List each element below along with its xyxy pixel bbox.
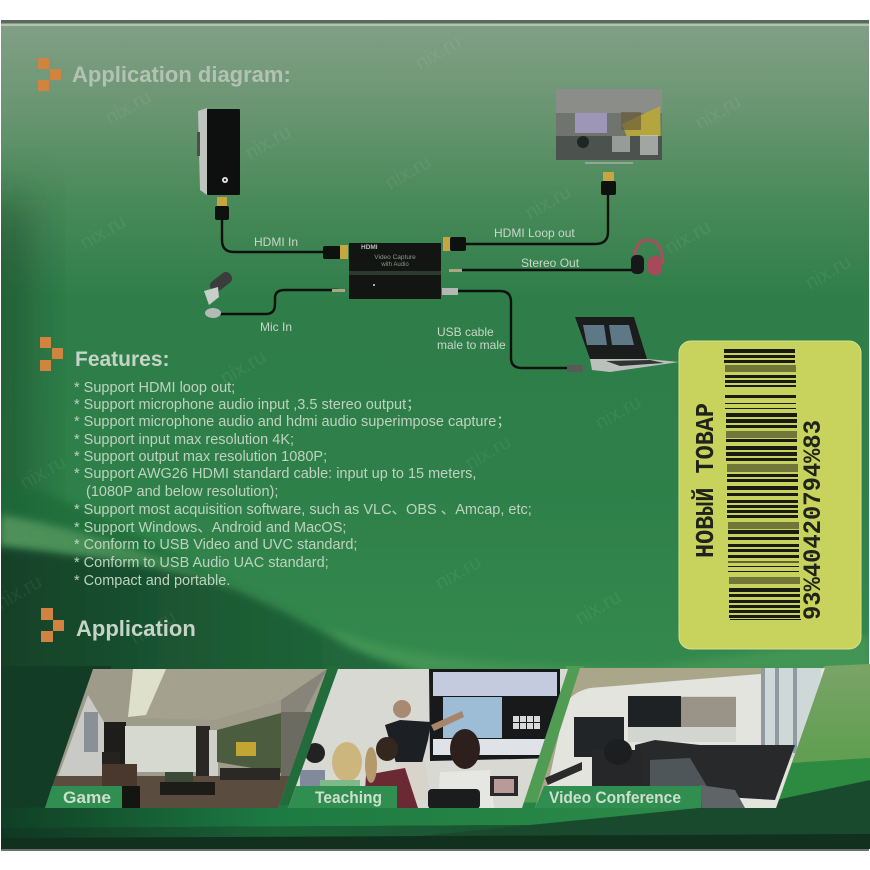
watermarks: nix.ru: nix.ru	[16, 451, 70, 494]
text block: feature list: (1080P and below resolution);	[86, 484, 278, 500]
sticker: barcode label	[679, 341, 861, 649]
heading: features: Features:	[75, 348, 170, 371]
labels: connection names: Stereo Out	[521, 256, 580, 270]
icon: microphone	[204, 270, 234, 318]
labels: connection names: HDMI Loop out	[494, 226, 575, 240]
text: new product: НОВЫЙ ТОВАР	[691, 403, 721, 558]
text block: feature list: * Conform to USB Audio UAC standard;	[74, 555, 329, 571]
text block: feature list: * Conform to USB Video and UVC standard;	[74, 537, 357, 553]
label: game: Game	[63, 788, 111, 807]
text block: feature list: * Compact and portable.	[74, 573, 230, 589]
icon: USB plug at laptop	[567, 365, 583, 372]
labels: connection names: Mic In	[260, 320, 292, 334]
labels: connection names: male to male	[437, 338, 506, 352]
watermarks: nix.ru: nix.ru	[592, 391, 645, 434]
barcode	[724, 349, 801, 620]
icon: capture device: with Audio	[380, 262, 409, 268]
watermarks: nix.ru: nix.ru	[662, 216, 715, 259]
label: teaching	[288, 786, 397, 808]
watermarks: nix.ru: nix.ru	[522, 181, 575, 224]
watermarks: nix.ru: nix.ru	[412, 31, 465, 74]
watermarks: nix.ru: nix.ru	[102, 86, 155, 129]
text block: feature list: * Support most acquisition software, such as VLC、OBS 、Amcap, etc;	[74, 502, 532, 518]
icon: HDMI connector at device input	[323, 245, 348, 259]
icon: TV screen	[556, 89, 662, 164]
icon: stereo plug	[449, 269, 462, 272]
icon: mic plug	[332, 289, 345, 292]
watermarks: nix.ru: nix.ru	[242, 121, 295, 164]
heading: application diagram	[38, 58, 291, 91]
icon: PC tower	[197, 108, 240, 195]
watermarks: nix.ru: nix.ru	[432, 551, 485, 594]
label: teaching: Teaching	[315, 788, 382, 807]
icon: HDMI connector loop out	[443, 237, 466, 251]
labels: connection names: HDMI In	[254, 235, 298, 249]
icon: capture device: HDMI	[361, 244, 378, 251]
label: video conference: Video Conference	[549, 788, 681, 807]
watermarks: nix.ru: nix.ru	[802, 251, 855, 294]
icon: laptop	[575, 317, 679, 372]
text block: feature list	[74, 380, 532, 589]
panel: game photo	[40, 669, 330, 811]
text block: feature list: * Support input max resolution 4K;	[74, 432, 294, 448]
icon: HDMI connector at PC	[215, 197, 229, 220]
label: game	[45, 786, 122, 808]
icon: headphones	[631, 240, 663, 275]
icon: USB plug at device	[442, 288, 458, 295]
panel: video conference photo	[530, 668, 830, 808]
text block: feature list: * Support AWG26 HDMI standard cable: input up to 15 meters,	[74, 466, 476, 482]
text block: feature list: * Support HDMI loop out;	[74, 380, 235, 396]
text block: feature list: * Support output max resolution 1080P;	[74, 449, 327, 465]
watermarks: nix.ru: nix.ru	[126, 606, 180, 649]
text block: feature list: * Support Windows、Android and MacOS;	[74, 520, 346, 536]
watermarks: nix.ru: nix.ru	[462, 431, 515, 474]
text block: feature list: * Support microphone audio input ,3.5 stereo output；	[74, 397, 421, 413]
watermarks: nix.ru: nix.ru	[572, 586, 625, 629]
watermarks: nix.ru: nix.ru	[382, 151, 435, 194]
panel: teaching photo	[285, 668, 575, 810]
icon: capture device: Video Capture	[374, 254, 416, 261]
text: barcode number: 93%40420794%83	[799, 420, 828, 620]
labels: connection names: USB cable	[437, 325, 494, 339]
text block: feature list: * Support microphone audio and hdmi audio superimpose capture；	[74, 414, 511, 430]
cables	[208, 194, 640, 368]
heading: features	[40, 337, 170, 371]
icon: capture device	[349, 243, 441, 299]
watermarks: nix.ru	[0, 31, 855, 649]
heading: application: Application	[76, 616, 196, 641]
diagram: device connections	[197, 89, 679, 372]
heading: application	[41, 608, 196, 642]
watermarks: nix.ru: nix.ru	[692, 91, 745, 134]
icon: HDMI connector at TV	[601, 172, 616, 195]
labels: connection names	[254, 226, 580, 352]
watermarks: nix.ru: nix.ru	[216, 346, 270, 389]
watermarks: nix.ru: nix.ru	[76, 211, 130, 254]
heading: application diagram: Application diagram:	[72, 62, 291, 87]
